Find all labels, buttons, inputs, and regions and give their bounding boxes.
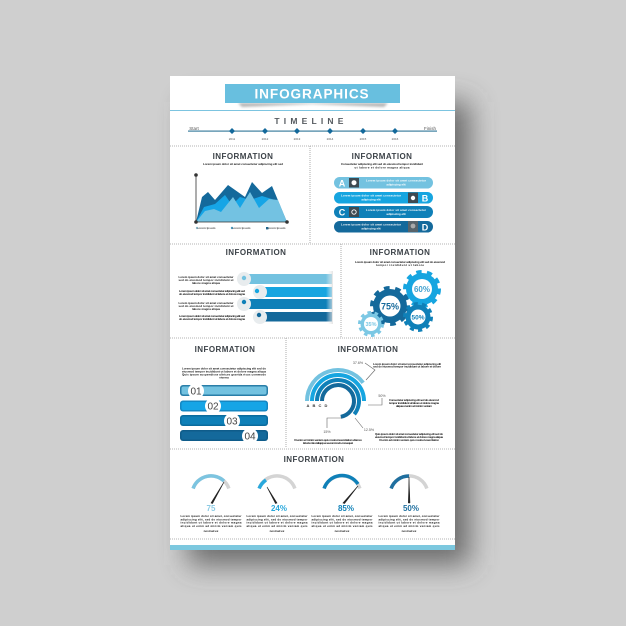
timeline: Finish bbox=[424, 126, 436, 131]
page shadow bbox=[188, 102, 470, 565]
title banner: INFOGRAPHICS bbox=[254, 86, 370, 102]
gauge 75: 75 bbox=[207, 504, 216, 513]
callout 12.5%: eiusmod tempor incididunt ut labore et dolore magna aliqua bbox=[375, 435, 443, 439]
panel: numbered progress bars: viverra bbox=[219, 376, 229, 380]
callout 15% bbox=[294, 430, 362, 445]
pill B: B bbox=[422, 194, 429, 204]
gauge text 2: nostrud ex bbox=[270, 529, 285, 533]
pill B: adipiscing elit bbox=[361, 198, 381, 202]
gauge text 2: Lorem ipsum dolor sit amet, consectetur bbox=[246, 514, 308, 518]
panel: gauges bbox=[180, 455, 440, 533]
callout 15%: 15% bbox=[323, 430, 331, 434]
callout 50% bbox=[378, 394, 439, 408]
callout 50%: tempor incididunt ut labore et dolore magna bbox=[389, 401, 439, 405]
row 4 bbox=[179, 310, 332, 324]
heading: INFORMATION bbox=[195, 345, 255, 354]
callout 12.5% bbox=[364, 428, 443, 442]
legend: Lorem Ipsum bbox=[232, 226, 251, 230]
pill C: C bbox=[339, 208, 346, 218]
title banner bbox=[225, 84, 400, 107]
row 4: Lorem ipsum dolor sit amet consectetur adipiscing elit sed bbox=[179, 314, 245, 318]
callout 12.5%: Quis ipsum dolor sit amet consectetur adipiscing elit sed do bbox=[375, 432, 443, 436]
callout 15%: Ut enim ad minim veniam quis nostrud exercitation ullamco bbox=[294, 438, 362, 442]
chart: layered mountains bbox=[194, 173, 289, 224]
description: Lorem ipsum dolor sit amet consectetur adipiscing elit sed bbox=[203, 162, 283, 166]
callout 37.6%: sed do eiusmod tempor incididunt ut labore et dolore bbox=[373, 364, 441, 368]
arc letters: B bbox=[313, 403, 316, 408]
gauge text 4: aliqua ut enim ad minim veniam quis bbox=[378, 524, 440, 528]
heading: INFORMATION bbox=[284, 455, 344, 464]
row 2 bbox=[179, 285, 332, 299]
row 1: labore magna aliqua bbox=[192, 281, 220, 285]
leader lines bbox=[327, 363, 382, 428]
poster page bbox=[170, 76, 455, 550]
callout 15%: laboris nisi ut aliquip ex ea commodo consequat bbox=[303, 441, 353, 445]
panel: gears bbox=[355, 248, 445, 336]
gear 35%: 35% bbox=[365, 322, 377, 328]
gauge 85%: 85% bbox=[338, 504, 354, 513]
callout 37.6%: 37.6% bbox=[353, 361, 364, 365]
gauge text 3: Lorem ipsum dolor sit amet, consectetur bbox=[312, 514, 373, 518]
panel: numbered progress bars: eiusmod tempor incididunt ut labore et dolore magna aliqua bbox=[182, 370, 266, 374]
gauge text 2 bbox=[246, 514, 308, 533]
row 2: do eiusmod tempor incididunt ut labore et dolore magna bbox=[179, 292, 245, 296]
gauge 50%: 50% bbox=[403, 504, 419, 513]
pill A: Lorem ipsum dolor sit amet consectetur bbox=[366, 178, 427, 182]
gauge text 4: adipiscing elit, sed do eiusmod tempor bbox=[378, 517, 440, 521]
timeline: 2013 bbox=[294, 137, 301, 141]
callout 12.5%: Ut enim ad minim veniam quis nostrud exercitation bbox=[379, 438, 439, 442]
timeline: 2014 bbox=[327, 137, 334, 141]
timeline: 2015 bbox=[360, 137, 367, 141]
pill A: adipiscing elit bbox=[386, 182, 406, 186]
gauge text 2: aliqua ut enim ad minim veniam quis bbox=[246, 524, 308, 528]
pill C: Lorem ipsum dolor sit amet consectetur bbox=[366, 208, 427, 212]
pill C: adipiscing elit bbox=[386, 212, 406, 216]
gauge 75 bbox=[193, 476, 229, 513]
panel: numbered progress bars: Quis ipsum suspendisse ultrices gravida risus commodo bbox=[182, 372, 266, 376]
gauge 24% bbox=[259, 476, 295, 513]
panel: radial chart bbox=[294, 345, 443, 445]
gauge text 4: nostrud ex bbox=[402, 529, 417, 533]
timeline: 2016 bbox=[392, 137, 399, 141]
pill D: adipiscing elit bbox=[361, 226, 381, 230]
arc letters bbox=[307, 403, 328, 408]
pill D: D bbox=[422, 222, 429, 232]
gauge text 1: adipiscing elit, sed do eiusmod tempor bbox=[180, 517, 242, 521]
gauge text 1 bbox=[180, 514, 242, 533]
arc letters: D bbox=[325, 403, 328, 408]
gauge 50% bbox=[391, 476, 427, 513]
bar 02: 02 bbox=[207, 402, 219, 412]
callout 50%: Consectetur adipiscing elit sed do eiusmod bbox=[389, 398, 439, 402]
gauge text 3: adipiscing elit, sed do eiusmod tempor bbox=[312, 517, 373, 521]
row 3: labore magna aliqua bbox=[192, 307, 220, 311]
gauge text 3 bbox=[312, 514, 373, 533]
heading: INFORMATION bbox=[370, 248, 430, 257]
gauge 24%: 24% bbox=[271, 504, 287, 513]
row 1: Lorem ipsum dolor sit amet consectetur bbox=[178, 275, 234, 279]
gauge text 2: incididunt ut labore et dolore magna bbox=[246, 521, 308, 525]
gauge text 4: incididunt ut labore et dolore magna bbox=[378, 521, 440, 525]
legend: Lorem Ipsum bbox=[197, 226, 216, 230]
timeline: TIMELINE bbox=[274, 116, 348, 126]
gauge text 2: adipiscing elit, sed do eiusmod tempor bbox=[246, 517, 308, 521]
gauge text 3: incididunt ut labore et dolore magna bbox=[312, 521, 373, 525]
heading: INFORMATION bbox=[352, 152, 412, 161]
callout 37.6%: Lorem ipsum dolor sit amet consectetur adipiscing elit bbox=[373, 362, 441, 366]
timeline: Start bbox=[189, 126, 199, 131]
row 2: Lorem ipsum dolor sit amet consectetur adipiscing elit sed bbox=[179, 289, 245, 293]
gear 60%: 60% bbox=[414, 285, 430, 294]
legend bbox=[196, 226, 286, 230]
bar 01: 01 bbox=[190, 386, 202, 398]
pill D: Lorem ipsum dolor sit amet consectetur bbox=[341, 222, 402, 226]
pill A bbox=[334, 177, 433, 188]
gauge text 1: nostrud ex bbox=[204, 529, 219, 533]
callout 50%: aliqua ut enim ad minim veniam bbox=[396, 404, 432, 408]
heading: INFORMATION bbox=[213, 152, 273, 161]
panel: option pills bbox=[334, 152, 433, 232]
arc letters: C bbox=[319, 403, 322, 408]
gauge text 4 bbox=[378, 514, 440, 533]
bar 04: 04 bbox=[244, 432, 256, 442]
legend: Lorem Ipsum bbox=[267, 226, 286, 230]
panel: gears: tempor incididunt ut labore bbox=[376, 263, 424, 267]
arc letters: A bbox=[307, 403, 310, 408]
panel: area chart bbox=[194, 152, 289, 230]
pill A: A bbox=[339, 178, 346, 188]
gauge text 1: incididunt ut labore et dolore magna bbox=[180, 521, 242, 525]
heading: INFORMATION bbox=[226, 248, 286, 257]
row 1: sed do eiusmod tempor incididunt ut bbox=[178, 278, 234, 282]
gauge text 3: aliqua ut enim ad minim veniam quis bbox=[312, 524, 373, 528]
callout 12.5%: 12.5% bbox=[364, 428, 375, 432]
gauge text 4: Lorem ipsum dolor sit amet, consectetur bbox=[378, 514, 440, 518]
row 3 bbox=[178, 297, 332, 311]
radial arcs bbox=[307, 370, 364, 417]
bar 03: 03 bbox=[226, 416, 238, 428]
gear 75%: 75% bbox=[381, 302, 399, 312]
panel: stepped bars bbox=[178, 248, 333, 324]
gear 50%: 50% bbox=[411, 314, 425, 322]
panel: option pills: ut labore et dolore magna aliqua bbox=[354, 166, 410, 170]
pill C bbox=[334, 206, 433, 218]
pill B bbox=[334, 192, 433, 204]
timeline bbox=[188, 116, 437, 141]
gauge 85% bbox=[324, 475, 360, 513]
row 4: do eiusmod tempor incididunt ut labore et dolore magna bbox=[179, 317, 245, 321]
description: Lorem ipsum dolor sit amet consectetur adipiscing elit sed do eiusmod bbox=[355, 260, 445, 264]
row 3: sed do eiusmod tempor incididunt ut bbox=[178, 304, 234, 308]
gauge text 1: aliqua ut enim ad minim veniam quis bbox=[180, 524, 242, 528]
description: Consectetur adipiscing elit sed do eiusmod tempor incididunt bbox=[341, 162, 423, 166]
timeline: 2012 bbox=[262, 137, 269, 141]
gauge text 1: Lorem ipsum dolor sit amet, consectetur bbox=[180, 514, 242, 518]
callout 50%: 50% bbox=[378, 394, 386, 398]
timeline: 2011 bbox=[229, 137, 236, 141]
row 3: Lorem ipsum dolor sit amet consectetur bbox=[178, 301, 234, 305]
pill D bbox=[334, 221, 433, 232]
heading: INFORMATION bbox=[338, 345, 398, 354]
bar end fade bbox=[326, 271, 333, 324]
description: Lorem ipsum dolor sit amet consectetur adipiscing elit sed do bbox=[182, 366, 266, 370]
panel: numbered progress bars bbox=[180, 345, 268, 444]
row 1 bbox=[178, 272, 332, 286]
pill B: Lorem ipsum dolor sit amet consectetur bbox=[341, 194, 402, 198]
callout 37.6% bbox=[353, 361, 441, 368]
gauge text 3: nostrud ex bbox=[335, 529, 350, 533]
